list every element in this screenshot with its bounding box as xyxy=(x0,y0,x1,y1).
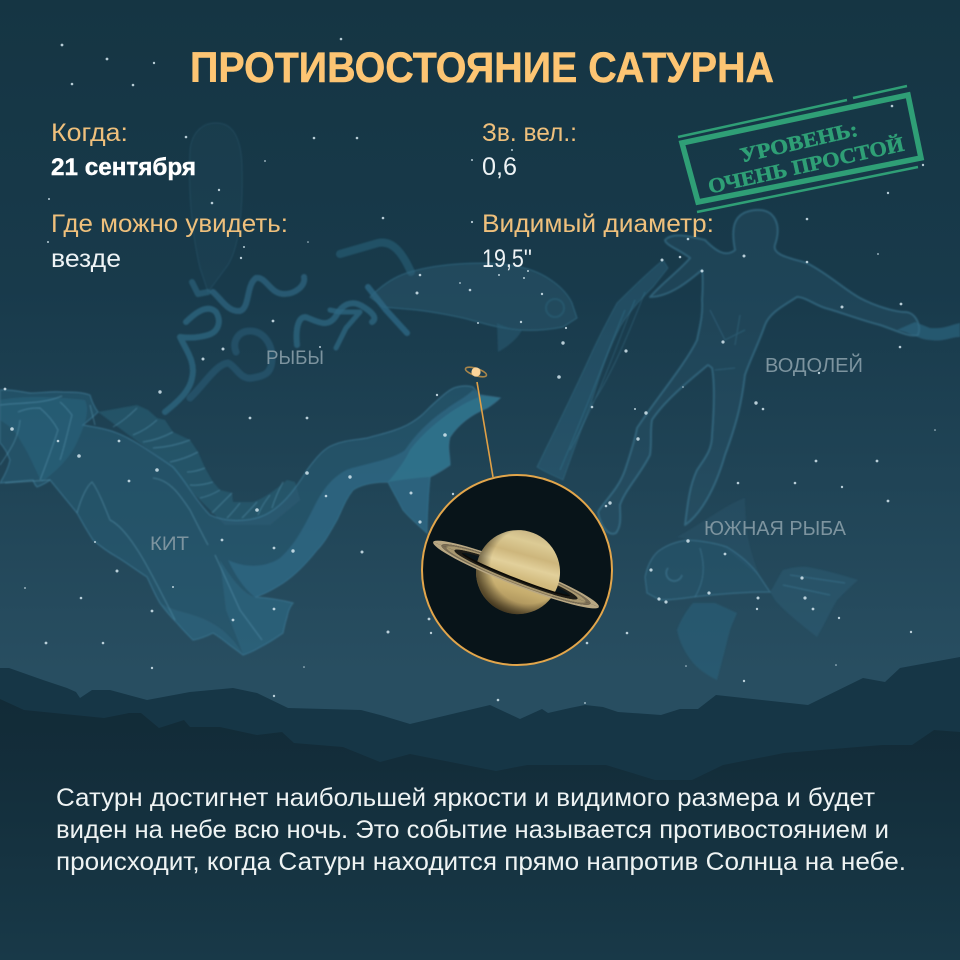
constellation: Cetus (whale) xyxy=(0,386,500,655)
mountains: back ridge xyxy=(0,657,960,800)
pointer line xyxy=(477,382,493,477)
description text: виден на небе всю ночь. Это событие называется противостоянием и xyxy=(56,816,889,844)
label: Pisces: РЫБЫ xyxy=(266,348,324,369)
info: where label: Где можно увидеть: xyxy=(51,210,288,238)
constellation: Southern Fish xyxy=(645,498,858,680)
info: diameter value: 19,5'' xyxy=(482,245,532,273)
constellation: Pisces xyxy=(165,123,577,412)
stamp: difficulty level: ОЧЕНЬ ПРОСТОЙ xyxy=(706,132,906,199)
planet Saturn xyxy=(433,530,599,614)
whale tail band xyxy=(228,390,500,597)
whale ribs and body lines xyxy=(0,396,283,640)
label: Cetus: КИТ xyxy=(150,534,189,555)
whale body xyxy=(0,386,500,655)
info: magnitude label: Зв. вел.: xyxy=(482,119,577,147)
label: Aquarius: ВОДОЛЕЙ xyxy=(765,353,863,377)
whale bright tail fin xyxy=(388,396,500,482)
constellation: Aquarius xyxy=(537,210,960,534)
mountains: front ridge and ground xyxy=(0,699,960,960)
title: ПРОТИВОСТОЯНИЕ САТУРНА xyxy=(190,44,774,92)
whale dorsal fin xyxy=(98,405,300,525)
description text xyxy=(56,784,906,876)
whale head and fluke xyxy=(0,397,87,482)
stars xyxy=(4,38,936,704)
info: when value: 21 сентября xyxy=(51,154,196,181)
Saturn close-up circle xyxy=(417,475,617,665)
info: where value: везде xyxy=(51,245,121,273)
info: diameter label: Видимый диаметр: xyxy=(482,210,714,238)
stamp: difficulty level: УРОВЕНЬ: xyxy=(738,117,860,167)
description text: происходит, когда Сатурн находится прямо напротив Солнца на небе. xyxy=(56,848,906,876)
info: magnitude value: 0,6 xyxy=(482,153,517,181)
label: Southern Fish: ЮЖНАЯ РЫБА xyxy=(704,518,847,540)
icon: small Saturn marker xyxy=(464,365,488,379)
stamp: difficulty level xyxy=(678,86,921,212)
description text: Сатурн достигнет наибольшей яркости и видимого размера и будет xyxy=(56,784,876,812)
info: when label: Когда: xyxy=(51,119,128,147)
